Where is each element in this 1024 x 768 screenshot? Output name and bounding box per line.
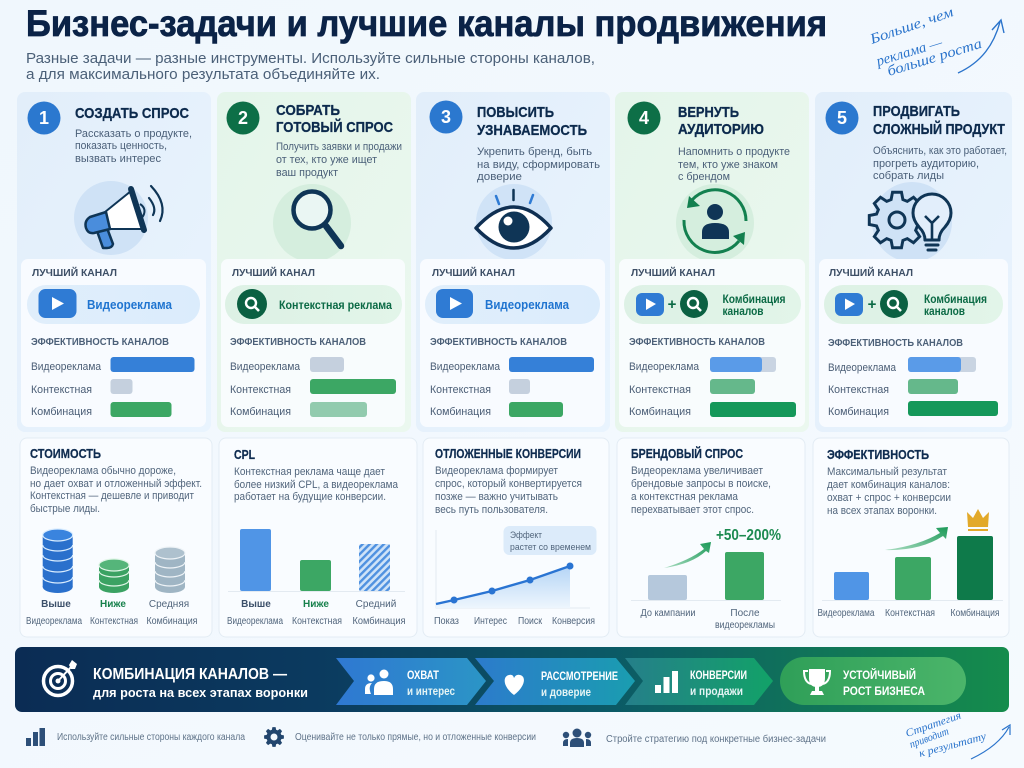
icon: people group xyxy=(563,728,591,747)
handwritten note: bottom right: к результату xyxy=(918,730,988,760)
label: ЛУЧШИЙ КАНАЛ xyxy=(829,266,913,279)
chart labels: Видеореклама xyxy=(818,608,875,619)
text: спрос, который конвертируется xyxy=(435,478,582,490)
description: доверие xyxy=(477,171,522,183)
heading: СТОИМОСТЬ xyxy=(30,446,101,461)
description xyxy=(477,146,600,183)
heading: СОБРАТЬ xyxy=(276,102,340,119)
handwritten note: bottom right: Стратегия xyxy=(904,710,963,740)
handwritten note: top right: больше роста xyxy=(885,36,984,80)
best channel pill xyxy=(27,285,200,324)
description: Укрепить бренд, быть xyxy=(477,146,592,158)
text: Контекстная реклама чаще дает xyxy=(234,466,385,478)
stage: consideration: и доверие xyxy=(541,687,591,699)
best channel pill: + xyxy=(868,296,877,313)
text: быстрые лиды. xyxy=(30,503,100,515)
effectiveness bars xyxy=(430,357,594,418)
heading: ПРОДВИГАТЬ xyxy=(873,103,960,120)
text: на всех этапах воронки. xyxy=(827,505,937,517)
icon: crown xyxy=(967,509,989,531)
number badge 5: 5 xyxy=(837,108,847,128)
chart labels: Показ xyxy=(434,616,459,627)
icon: eye xyxy=(476,184,552,260)
stage: conversion: и продажи xyxy=(690,686,743,698)
tip: channel strengths xyxy=(26,728,245,746)
text: весь путь пользователя. xyxy=(435,504,548,516)
stage: consideration: РАССМОТРЕНИЕ xyxy=(541,671,618,683)
description: Рассказать о продукте, xyxy=(75,128,192,140)
heading xyxy=(276,102,393,136)
icon: trophy xyxy=(804,669,830,695)
label: ЭФФЕКТИВНОСТЬ КАНАЛОВ xyxy=(31,336,169,348)
icon: gear and light bulb xyxy=(869,182,952,262)
description: вызвать интерес xyxy=(75,153,162,165)
effectiveness bars: Видеореклама xyxy=(230,361,301,373)
chart labels: Средний xyxy=(356,599,396,610)
heading: ЭФФЕКТИВНОСТЬ xyxy=(827,447,929,462)
chart labels: Средняя xyxy=(149,599,189,610)
text: охват + спрос + конверсии xyxy=(827,492,951,504)
description xyxy=(678,146,790,183)
stat: +50–200% xyxy=(716,527,781,544)
panel: best channel and effectiveness xyxy=(619,259,805,427)
tip: delayed conversions: Оценивайте не только прямые, но и отложенные конверсии xyxy=(295,732,536,743)
number badge 1: 1 xyxy=(39,108,49,128)
text: Видеореклама обычно дороже, xyxy=(30,465,176,477)
icon: target xyxy=(44,660,77,696)
handwritten note: top right: Больше, чем xyxy=(867,4,956,48)
tip: delayed conversions xyxy=(264,727,536,747)
title: Бизнес-задачи и лучшие каналы продвижения xyxy=(26,3,827,44)
panel: task 3 raise awareness xyxy=(416,92,610,432)
effectiveness bars: Видеореклама xyxy=(828,362,897,374)
heading: ПОВЫСИТЬ xyxy=(477,104,554,121)
chart labels: Видеореклама xyxy=(227,616,283,627)
effectiveness bars xyxy=(828,357,998,418)
effectiveness bars: Комбинация xyxy=(629,406,691,418)
effectiveness bars xyxy=(230,357,396,418)
chart labels xyxy=(26,599,198,627)
effectiveness bars: Контекстная xyxy=(828,384,889,396)
effectiveness bars xyxy=(31,357,194,418)
label: ЛУЧШИЙ КАНАЛ xyxy=(432,266,515,279)
chart labels: Комбинация xyxy=(950,607,1000,619)
text: а контекстная реклама xyxy=(631,491,739,503)
panel: task 2 capture demand xyxy=(217,92,411,432)
icon: heart xyxy=(505,675,524,695)
handwritten note: top right: реклама — xyxy=(874,35,944,70)
best channel pill xyxy=(225,285,402,324)
text xyxy=(827,466,951,517)
handwritten note: top right xyxy=(867,4,1004,80)
effectiveness bars: Видеореклама xyxy=(430,361,501,373)
description xyxy=(873,145,1007,182)
best channel pill: каналов xyxy=(924,306,965,318)
chart: effectiveness bars xyxy=(822,527,1003,600)
tip: channel strengths: Используйте сильные стороны каждого канала xyxy=(57,732,245,743)
icon: bars xyxy=(655,671,678,693)
chart labels: Выше xyxy=(241,599,271,610)
number badge 3: 3 xyxy=(441,107,451,127)
effectiveness bars: Комбинация xyxy=(828,406,889,418)
panel: delayed conversions xyxy=(423,438,609,637)
description: ваш продукт xyxy=(276,167,338,179)
heading xyxy=(678,104,764,138)
effectiveness bars: Контекстная xyxy=(230,384,291,396)
number badge 4 xyxy=(628,102,660,134)
best channel pill: + xyxy=(668,296,677,313)
callout: растет со временем xyxy=(510,542,591,553)
text: Максимальный результат xyxy=(827,466,947,478)
description: Напомнить о продукте xyxy=(678,146,790,158)
handwritten note: bottom right: приводит xyxy=(908,726,951,751)
panel: cost xyxy=(20,438,212,637)
chart: growth line xyxy=(436,530,590,608)
text: брендовые запросы в поиске, xyxy=(631,478,771,490)
stage: reach: ОХВАТ xyxy=(407,670,439,682)
effectiveness bars: Комбинация xyxy=(31,406,92,418)
effectiveness bars: Контекстная xyxy=(31,384,92,396)
chart labels xyxy=(640,608,775,631)
stage: sustainable growth: УСТОЙЧИВЫЙ xyxy=(843,667,916,682)
tip: strategy xyxy=(563,728,826,747)
label: ЛУЧШИЙ КАНАЛ xyxy=(631,266,715,279)
chart: brand bars xyxy=(631,542,781,600)
chart labels xyxy=(818,607,1000,619)
label: ЛУЧШИЙ КАНАЛ xyxy=(232,266,315,279)
best channel pill xyxy=(425,285,600,324)
icon: megaphone xyxy=(74,181,163,255)
subtitle xyxy=(26,50,595,83)
description: от тех, кто уже ищет xyxy=(276,154,377,166)
number badge 4: 4 xyxy=(639,108,649,128)
chart labels: Контекстная xyxy=(292,616,342,627)
text: но дает охват и отложенный эффект. xyxy=(30,478,202,490)
panel: CPL xyxy=(219,438,417,637)
number badge 2: 2 xyxy=(238,108,248,128)
chart labels: Контекстная xyxy=(90,616,138,627)
stage: sustainable growth: РОСТ БИЗНЕСА xyxy=(843,684,925,698)
best channel pill: Комбинация xyxy=(924,294,987,306)
stage: sustainable growth xyxy=(780,657,966,705)
heading: ВЕРНУТЬ xyxy=(678,104,739,121)
description: прогреть аудиторию, xyxy=(873,158,979,170)
text: дает комбинация каналов: xyxy=(827,479,950,491)
text xyxy=(435,465,582,516)
best channel pill: Видеореклама xyxy=(87,298,173,312)
text xyxy=(631,465,771,516)
text: Видеореклама формирует xyxy=(435,465,558,477)
description: с брендом xyxy=(678,171,730,183)
best channel pill: Комбинация xyxy=(722,294,786,306)
effectiveness bars: Контекстная xyxy=(430,384,491,396)
chart labels: видеорекламы xyxy=(715,620,775,631)
chart labels: Ниже xyxy=(100,599,126,610)
chart labels: Контекстная xyxy=(885,608,935,619)
text: Контекстная — дешевле и приводит xyxy=(30,490,194,502)
label: ЭФФЕКТИВНОСТЬ КАНАЛОВ xyxy=(230,336,366,348)
best channel pill: Контекстная реклама xyxy=(279,298,392,312)
text: позже — важно учитывать xyxy=(435,491,558,503)
label: ЭФФЕКТИВНОСТЬ КАНАЛОВ xyxy=(828,337,963,349)
heading xyxy=(873,103,1005,138)
label: ЭФФЕКТИВНОСТЬ КАНАЛОВ xyxy=(430,336,567,348)
subtitle: а для максимального результата объединяйте их. xyxy=(26,66,380,83)
panel: brand demand xyxy=(617,438,805,637)
stage: reach xyxy=(336,658,486,705)
panel: best channel and effectiveness xyxy=(221,259,405,427)
description xyxy=(276,141,402,179)
panel: task 1 create demand xyxy=(17,92,211,432)
number badge 2 xyxy=(226,102,260,134)
heading: БРЕНДОВЫЙ СПРОС xyxy=(631,446,743,461)
text: работает на будущие конверсии. xyxy=(234,491,386,503)
chart: coin stacks xyxy=(43,529,185,593)
tip: strategy: Стройте стратегию под конкретные бизнес-задачи xyxy=(606,733,826,745)
icon: magnifier xyxy=(273,184,351,262)
chart labels: Выше xyxy=(41,599,71,610)
heading: УЗНАВАЕМОСТЬ xyxy=(477,122,587,139)
subtitle: Разные задачи — разные инструменты. Используйте сильные стороны каналов, xyxy=(26,50,595,67)
callout xyxy=(504,526,596,555)
heading: СОЗДАТЬ СПРОС xyxy=(75,105,189,122)
chart labels xyxy=(434,616,595,627)
heading: CPL xyxy=(234,447,255,462)
label: ЭФФЕКТИВНОСТЬ КАНАЛОВ xyxy=(629,336,765,348)
chart: CPL bars xyxy=(228,529,405,592)
icon: gear xyxy=(264,727,284,747)
best channel pill: каналов xyxy=(722,306,764,318)
description: Объяснить, как это работает, xyxy=(873,145,1007,157)
description: показать ценность, xyxy=(75,140,167,152)
number badge 3 xyxy=(430,100,462,134)
best channel pill xyxy=(624,285,801,324)
banner heading xyxy=(93,666,308,700)
chart labels: Комбинация xyxy=(352,615,406,627)
chart labels: После xyxy=(730,608,760,619)
chart labels: Ниже xyxy=(303,599,329,610)
effectiveness bars: Видеореклама xyxy=(629,361,700,373)
chart labels: Интерес xyxy=(474,616,507,627)
effectiveness bars: Комбинация xyxy=(230,406,291,418)
icon: bars xyxy=(26,728,45,746)
chart labels: Видеореклама xyxy=(26,616,82,627)
text xyxy=(30,465,202,515)
best channel pill: Видеореклама xyxy=(485,298,570,312)
banner: channel combination funnel xyxy=(15,647,1009,712)
panel: effectiveness xyxy=(813,438,1009,637)
chart labels: До кампании xyxy=(640,608,696,619)
stage: consideration xyxy=(475,658,635,705)
panel: best channel and effectiveness xyxy=(21,259,206,427)
icon: returning customer xyxy=(676,184,754,262)
stage: conversion: КОНВЕРСИИ xyxy=(690,670,747,682)
heading xyxy=(477,104,587,139)
best channel pill xyxy=(824,285,1003,324)
panel: best channel and effectiveness xyxy=(819,259,1008,427)
icon: people xyxy=(365,670,393,695)
callout: Эффект xyxy=(510,530,543,541)
description: тем, кто уже знаком xyxy=(678,159,778,171)
number badge 5 xyxy=(826,102,858,134)
stage: reach: и интерес xyxy=(407,686,456,698)
description: собрать лиды xyxy=(873,170,944,182)
handwritten note: bottom right xyxy=(904,710,1010,760)
chart labels: Поиск xyxy=(518,616,543,627)
panel: task 5 promote complex product xyxy=(815,92,1012,432)
text: более низкий CPL, а видеореклама xyxy=(234,479,399,491)
text xyxy=(234,466,399,503)
panel: task 4 return audience xyxy=(615,92,809,432)
effectiveness bars: Контекстная xyxy=(629,384,691,396)
label: ЛУЧШИЙ КАНАЛ xyxy=(32,266,117,279)
panel: best channel and effectiveness xyxy=(420,259,605,427)
description: Получить заявки и продажи xyxy=(276,141,402,153)
chart labels: Комбинация xyxy=(146,615,198,627)
banner heading: КОМБИНАЦИЯ КАНАЛОВ — xyxy=(93,666,287,683)
heading: АУДИТОРИЮ xyxy=(678,121,764,138)
text: перехватывает этот спрос. xyxy=(631,504,754,516)
stage: conversion xyxy=(625,658,773,705)
chart labels: Конверсия xyxy=(552,616,595,627)
text: Видеореклама увеличивает xyxy=(631,465,763,477)
description: на виду, сформировать xyxy=(477,159,600,171)
chart labels xyxy=(227,599,406,627)
heading: ОТЛОЖЕННЫЕ КОНВЕРСИИ xyxy=(435,446,581,461)
effectiveness bars: Комбинация xyxy=(430,406,491,418)
heading: ГОТОВЫЙ СПРОС xyxy=(276,118,393,136)
description xyxy=(75,128,192,165)
banner heading: для роста на всех этапах воронки xyxy=(93,685,308,700)
effectiveness bars xyxy=(629,357,796,418)
number badge 1 xyxy=(28,102,60,134)
effectiveness bars: Видеореклама xyxy=(31,361,102,373)
